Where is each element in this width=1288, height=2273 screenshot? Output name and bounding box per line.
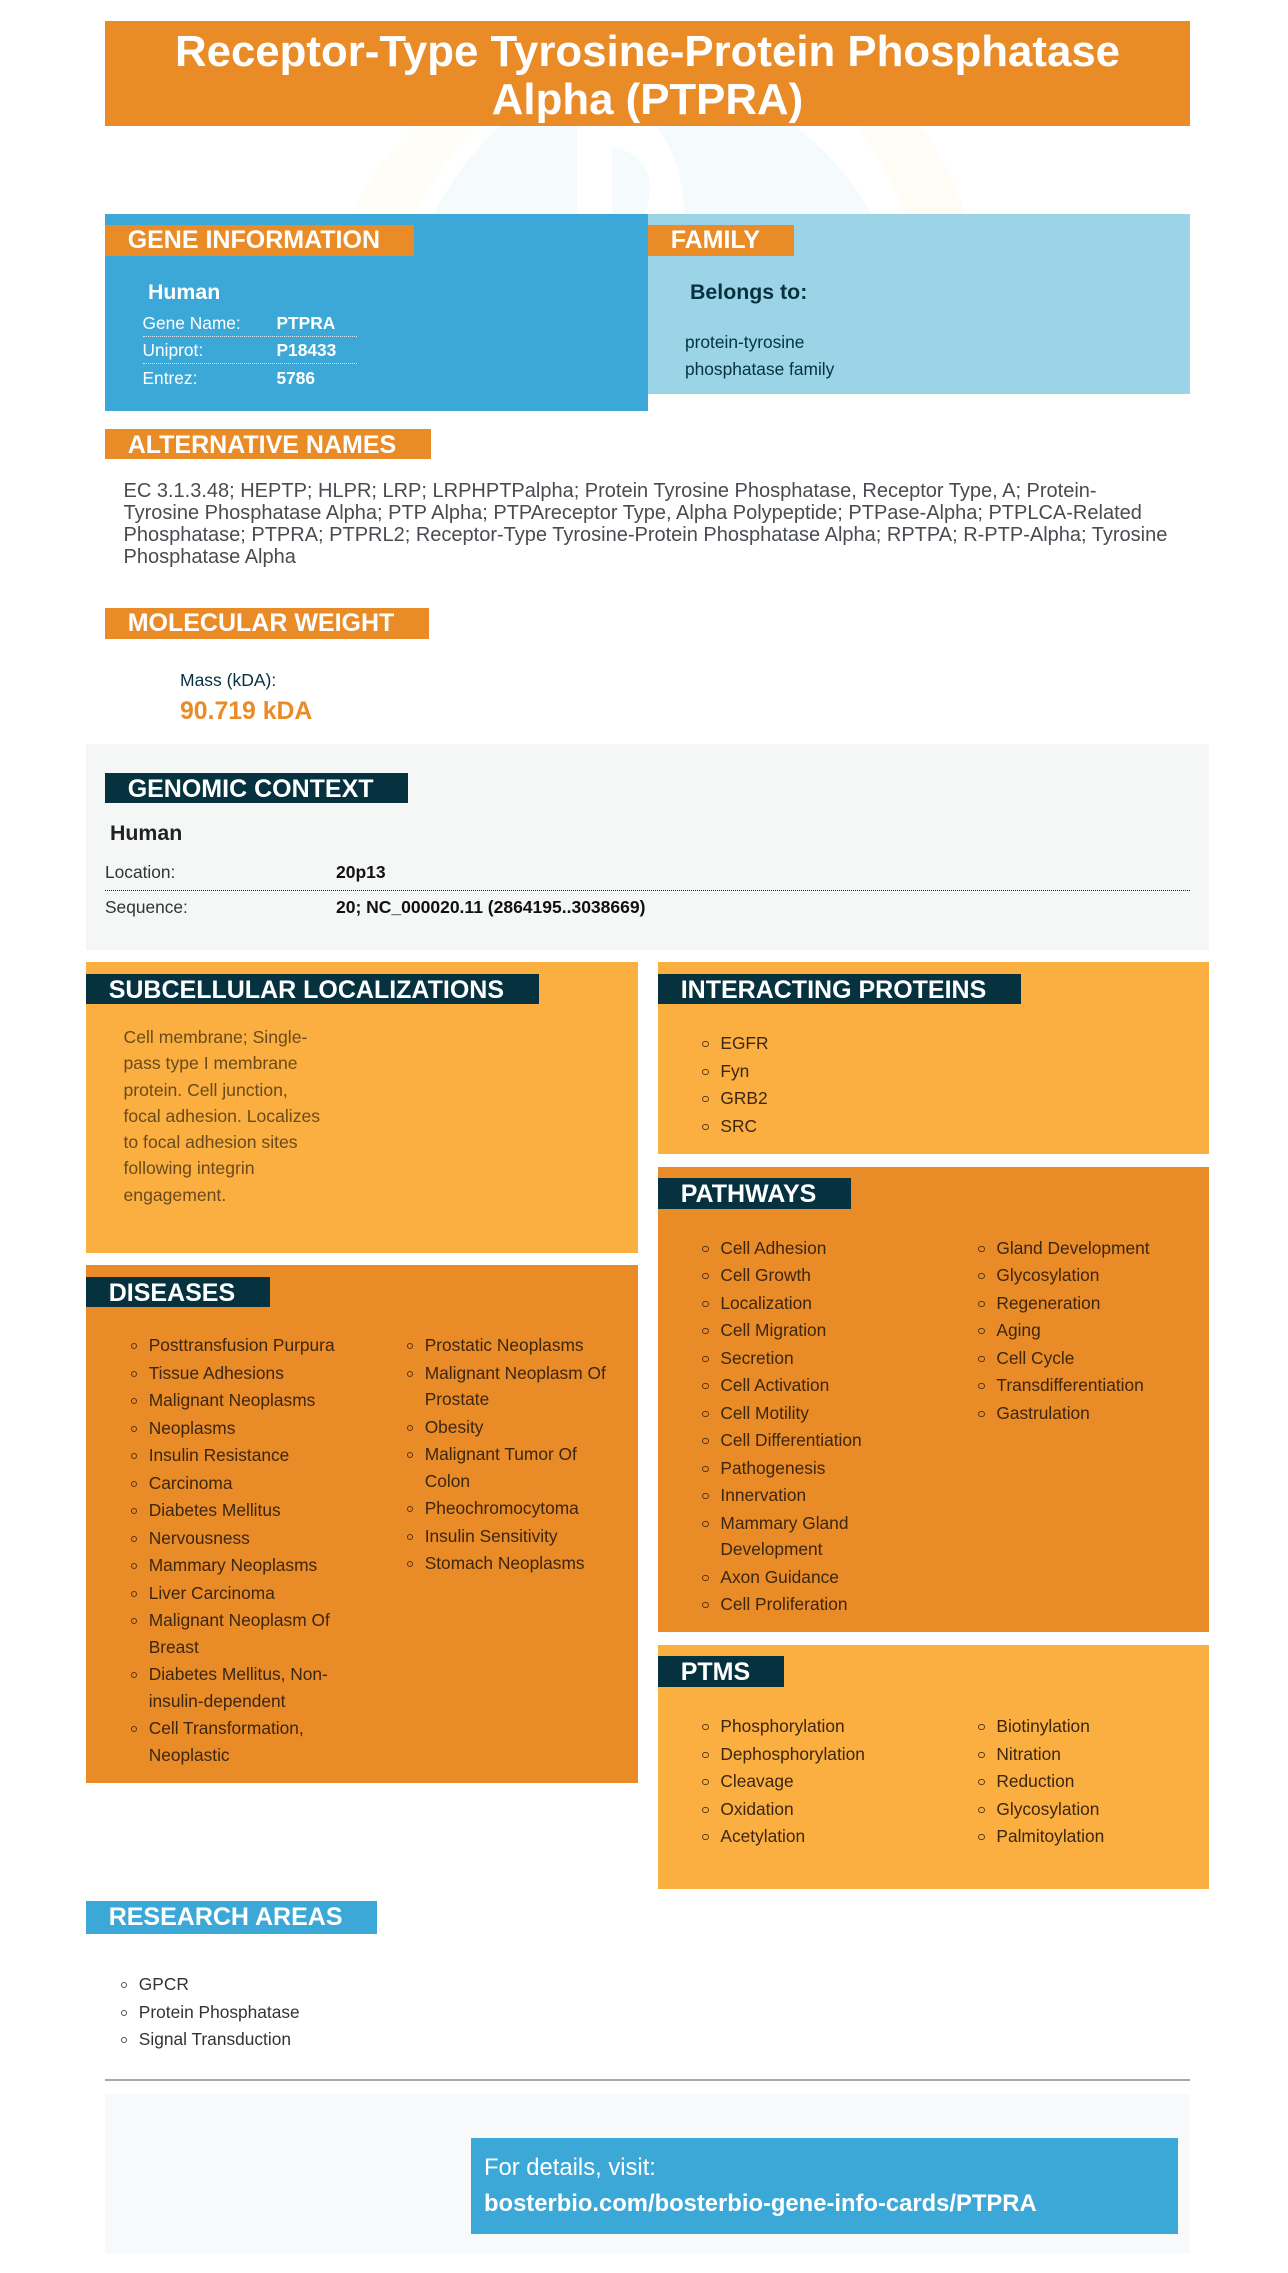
heading: family	[648, 225, 794, 256]
heading: PTMs: PTMS	[681, 1658, 750, 1686]
pathways list column 1	[702, 1238, 862, 1614]
species label: Human	[148, 280, 220, 304]
interacting protein list: SRC	[720, 1116, 757, 1136]
PTM list column 1: Oxidation	[720, 1798, 794, 1818]
interacting protein list	[702, 1033, 769, 1136]
pathways list column 1: Cell Migration	[720, 1320, 826, 1340]
diseases list column 2: Prostatic Neoplasms	[425, 1335, 584, 1355]
diseases list column 2: Malignant Neoplasm Of	[425, 1362, 606, 1382]
localization text: following integrin	[124, 1158, 255, 1178]
diseases list column 2: Pheochromocytoma	[425, 1498, 579, 1518]
gene name row: PTPRA	[276, 313, 335, 333]
family text	[685, 332, 834, 379]
panel: PTMs	[658, 1645, 1209, 1889]
diseases list column 1: Tissue Adhesions	[149, 1362, 284, 1382]
pathways list column 2: Cell Cycle	[996, 1348, 1074, 1368]
pathways list column 1: Localization	[720, 1292, 812, 1312]
mass value: 90.719 kDA	[180, 698, 312, 725]
PTM list column 1: Cleavage	[720, 1771, 794, 1791]
uniprot row: Uniprot:	[142, 340, 203, 360]
localization text: pass type I membrane	[124, 1053, 298, 1073]
sequence row	[105, 897, 645, 917]
diseases list column 2: Prostate	[425, 1389, 489, 1409]
interacting protein list: GRB2	[720, 1088, 768, 1108]
alternative names text	[124, 480, 1167, 568]
diseases list column 2: Obesity	[425, 1416, 483, 1436]
uniprot row: P18433	[276, 340, 336, 360]
family text: protein-tyrosine	[685, 332, 804, 352]
PTM list column 1	[702, 1716, 865, 1846]
heading: PTMs	[658, 1656, 784, 1687]
PTM list column 2: Palmitoylation	[996, 1826, 1104, 1846]
details url: bosterbio.com/bosterbio-gene-info-cards/PTPRA	[484, 2190, 1037, 2217]
details label: For details, visit:	[484, 2154, 656, 2181]
research areas list: GPCR	[139, 1974, 189, 1994]
title banner: Receptor-Type Tyrosine-Protein Phosphatase	[175, 26, 1120, 76]
heading: interacting proteins: INTERACTING PROTEINS	[681, 976, 986, 1004]
family text: phosphatase family	[685, 359, 834, 379]
localization text	[124, 1027, 320, 1205]
diseases list column 1: Diabetes Mellitus	[149, 1500, 281, 1520]
diseases list column 1: Neoplasms	[149, 1418, 235, 1438]
location row: Location:	[105, 862, 175, 882]
alternative names text: Phosphatase Alpha	[124, 546, 296, 568]
diseases list column 1: Cell Transformation,	[149, 1718, 304, 1738]
panel: gene information	[105, 214, 648, 411]
diseases list column 1: Neoplastic	[149, 1744, 230, 1764]
heading: gene information: GENE INFORMATION	[128, 226, 380, 254]
pathways list column 1: Axon Guidance	[720, 1566, 839, 1586]
heading: research areas: RESEARCH AREAS	[109, 1903, 343, 1931]
research areas list	[121, 1974, 300, 2049]
location row	[105, 859, 1190, 891]
PTM list column 2: Nitration	[996, 1744, 1061, 1764]
panel: pathways	[658, 1167, 1209, 1632]
heading: diseases: DISEASES	[109, 1279, 235, 1307]
diseases list column 1: Malignant Neoplasm Of	[149, 1610, 330, 1630]
pathways list column 2: Glycosylation	[996, 1265, 1099, 1285]
pathways list column 1: Development	[720, 1539, 822, 1559]
background watermark logo	[434, 126, 964, 214]
pathways list column 2: Transdifferentiation	[996, 1375, 1144, 1395]
pathways list column 1: Innervation	[720, 1485, 806, 1505]
pathways list column 2	[978, 1238, 1150, 1422]
pathways list column 2: Aging	[996, 1320, 1041, 1340]
sequence row: Sequence:	[105, 897, 188, 917]
title banner: Alpha (PTPRA)	[492, 74, 803, 124]
localization text: to focal adhesion sites	[124, 1132, 298, 1152]
gene name row	[142, 310, 356, 337]
diseases list column 1: Breast	[149, 1636, 199, 1656]
diseases list column 1: Nervousness	[149, 1528, 250, 1548]
panel: interacting proteins	[658, 962, 1209, 1154]
entrez row: 5786	[276, 368, 315, 388]
diseases list column 1: Mammary Neoplasms	[149, 1555, 317, 1575]
alternative names text: Phosphatase; PTPRA; PTPRL2; Receptor-Type Tyrosine-Protein Phosphatase Alpha; RPTPA; R-PTP-Alpha; Tyrosine	[124, 524, 1167, 546]
heading: research areas	[86, 1901, 377, 1934]
diseases list column 2: Colon	[425, 1470, 470, 1490]
pathways list column 1: Cell Differentiation	[720, 1430, 862, 1450]
gene name row: Gene Name:	[142, 313, 241, 333]
alternative names text: Tyrosine Phosphatase Alpha; PTP Alpha; PTPAreceptor Type, Alpha Polypeptide; PTPase-Alpha; PTPLCA-Related	[124, 502, 1142, 524]
title banner	[105, 21, 1190, 126]
diseases list column 1: Posttransfusion Purpura	[149, 1335, 335, 1355]
PTM list column 2	[978, 1716, 1104, 1846]
call to action box	[471, 2138, 1178, 2234]
diseases list column 1: Diabetes Mellitus, Non-	[149, 1664, 328, 1684]
localization text: engagement.	[124, 1185, 226, 1205]
heading: molecular weight: MOLECULAR WEIGHT	[128, 609, 394, 637]
pathways list column 2: Gastrulation	[996, 1402, 1090, 1422]
sequence row: 20; NC_000020.11 (2864195..3038669)	[336, 897, 645, 917]
pathways list column 2: Regeneration	[996, 1292, 1100, 1312]
diseases list column 1	[131, 1335, 335, 1764]
interacting protein list: Fyn	[720, 1060, 749, 1080]
entrez row	[142, 368, 315, 388]
localization text: protein. Cell junction,	[124, 1080, 288, 1100]
heading: family: FAMILY	[671, 226, 760, 254]
pathways list column 1: Cell Growth	[720, 1265, 811, 1285]
diseases list column 1: insulin-dependent	[149, 1690, 286, 1710]
uniprot row	[142, 337, 356, 364]
pathways list column 1: Cell Activation	[720, 1375, 829, 1395]
research areas list: Signal Transduction	[139, 2029, 291, 2049]
mass label: Mass (kDA):	[180, 670, 276, 690]
PTM list column 2: Biotinylation	[996, 1716, 1090, 1736]
diseases list column 1: Insulin Resistance	[149, 1445, 289, 1465]
pathways list column 1: Cell Adhesion	[720, 1238, 826, 1258]
heading: alternative names: ALTERNATIVE NAMES	[128, 431, 396, 459]
PTM list column 1: Acetylation	[720, 1826, 805, 1846]
PTM list column 2: Reduction	[996, 1771, 1074, 1791]
heading: subcellular localizations: SUBCELLULAR LOCALIZATIONS	[109, 976, 504, 1004]
pathways list column 1: Mammary Gland	[720, 1512, 848, 1532]
localization text: focal adhesion. Localizes	[124, 1106, 320, 1126]
panel: genomic context	[86, 744, 1209, 950]
heading: pathways: PATHWAYS	[681, 1180, 816, 1208]
diseases list column 2: Stomach Neoplasms	[425, 1553, 585, 1573]
panel: family	[648, 214, 1190, 394]
pathways list column 1: Secretion	[720, 1348, 794, 1368]
PTM list column 1: Dephosphorylation	[720, 1744, 865, 1764]
PTM list column 1: Phosphorylation	[720, 1716, 845, 1736]
species label: Human	[110, 821, 182, 845]
diseases list column 1: Liver Carcinoma	[149, 1582, 275, 1602]
heading: pathways	[658, 1178, 851, 1209]
footer panel	[105, 2094, 1190, 2253]
diseases list column 2	[407, 1335, 606, 1573]
alternative names text: EC 3.1.3.48; HEPTP; HLPR; LRP; LRPHPTPalpha; Protein Tyrosine Phosphatase, Receptor Type, A; Protein-	[124, 480, 1097, 502]
pathways list column 2: Gland Development	[996, 1238, 1150, 1258]
location row: 20p13	[336, 862, 386, 882]
interacting protein list: EGFR	[720, 1033, 769, 1053]
PTM list column 2: Glycosylation	[996, 1798, 1099, 1818]
pathways list column 1: Pathogenesis	[720, 1458, 825, 1478]
diseases list column 2: Insulin Sensitivity	[425, 1526, 558, 1546]
diseases list column 1: Carcinoma	[149, 1472, 232, 1492]
belongs to label: Belongs to:	[690, 280, 807, 304]
entrez row: Entrez:	[142, 368, 197, 388]
localization text: Cell membrane; Single-	[124, 1027, 307, 1047]
research areas list: Protein Phosphatase	[139, 2002, 300, 2022]
heading: genomic context: GENOMIC CONTEXT	[128, 775, 374, 803]
heading: diseases	[86, 1277, 270, 1307]
diseases list column 2: Malignant Tumor Of	[425, 1444, 577, 1464]
panel: subcellular localizations	[86, 962, 638, 1253]
pathways list column 1: Cell Proliferation	[720, 1594, 848, 1614]
pathways list column 1: Cell Motility	[720, 1402, 809, 1422]
diseases list column 1: Malignant Neoplasms	[149, 1390, 315, 1410]
panel: diseases	[86, 1265, 638, 1783]
